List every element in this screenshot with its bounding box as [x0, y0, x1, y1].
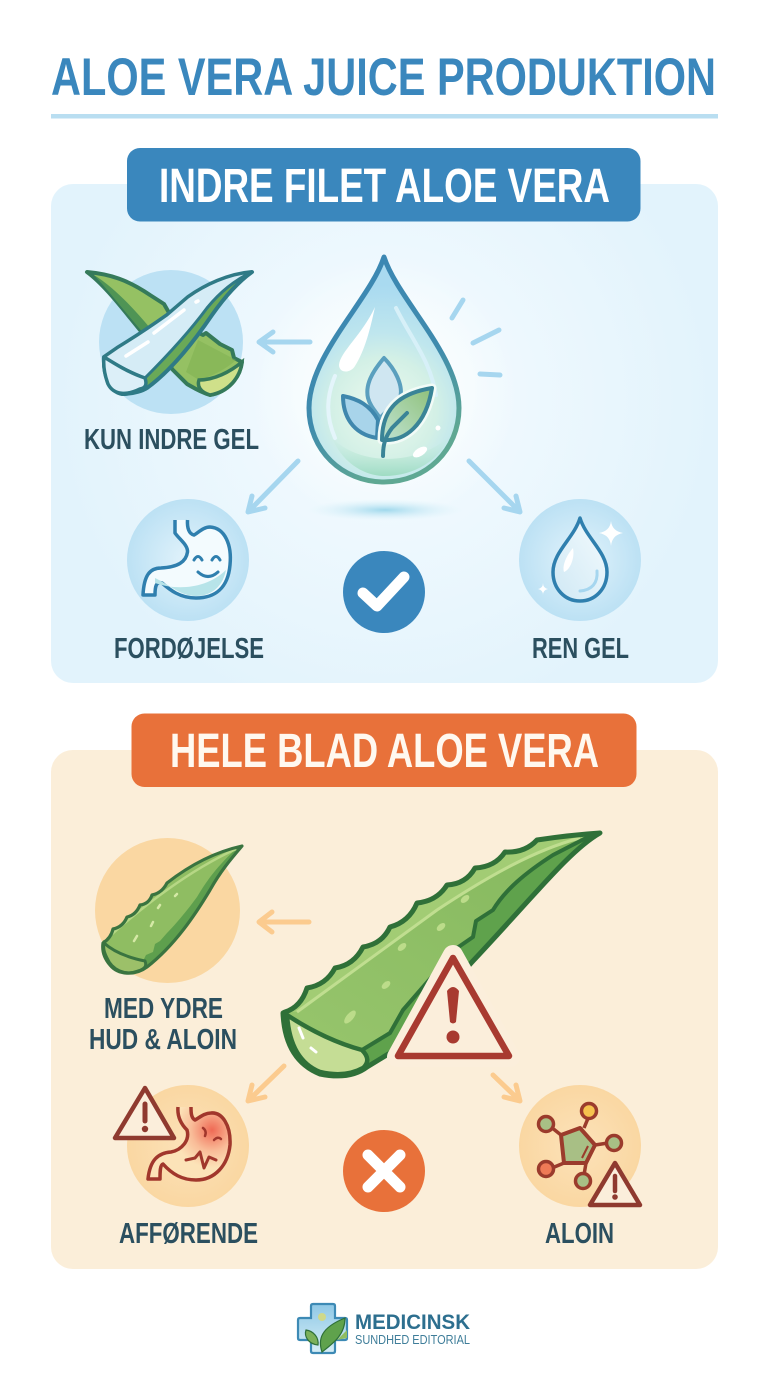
panel: hele blad [51, 714, 718, 1269]
icon: irritated stomach with warning [115, 1085, 249, 1207]
panel background: orange [51, 750, 718, 1269]
icon: centre leaf [367, 358, 401, 418]
icon: large warning triangle [397, 955, 510, 1057]
panel: indre filet [51, 148, 718, 683]
icon: pure gel drop [519, 499, 641, 621]
icon: sparkle rays [452, 300, 500, 375]
label: med ydre hud og aloin: MED YDRE [104, 993, 223, 1025]
arrow: to inner gel [259, 332, 310, 352]
gel fillet [104, 272, 252, 394]
heading badge: hele blad [132, 714, 636, 787]
icon: small warning [115, 1088, 174, 1138]
icon: happy stomach [127, 499, 249, 621]
heading badge: hele blad: HELE BLAD ALOE VERA [170, 725, 599, 778]
label: afforende: AFFØRENDE [119, 1218, 258, 1250]
icon: large aloe leaf [283, 833, 600, 1076]
arrow: to digestion [248, 461, 298, 512]
heading badge: indre filet: INDRE FILET ALOE VERA [159, 160, 610, 213]
icon: check mark badge [343, 551, 425, 633]
label: med ydre hud og aloin [89, 993, 237, 1056]
logo tagline: SUNDHED EDITORIAL [355, 1333, 470, 1347]
icon: aloin molecule with warning [519, 1085, 641, 1207]
heading badge: indre filet [127, 148, 640, 222]
logo: medicinsk sundhed editorial [298, 1304, 470, 1353]
label: ren gel: REN GEL [532, 633, 629, 665]
icon: right leaf [382, 388, 432, 440]
panel background: blue [51, 184, 718, 683]
arrow: to aloin [493, 1075, 520, 1101]
arrow: to pure gel [469, 461, 520, 512]
logo wordmark: MEDICINSK [355, 1311, 470, 1334]
arrow: to skin [259, 912, 309, 932]
icon: central water drop with leaves [249, 255, 519, 525]
icon: small leaf with skin [95, 838, 242, 983]
label: kun indre gel: KUN INDRE GEL [84, 424, 259, 456]
icon: small warning [590, 1163, 640, 1205]
label: fordojelse: FORDØJELSE [114, 633, 264, 665]
arrow: to laxative [248, 1066, 284, 1101]
label: med ydre hud og aloin: HUD & ALOIN [89, 1024, 237, 1056]
label: aloin: ALOIN [545, 1218, 614, 1250]
icon: left leaf [343, 396, 378, 438]
icon: crossed leaf and gel fillet [87, 270, 252, 414]
icon: cross badge [343, 1130, 425, 1212]
green outer leaf [87, 272, 242, 395]
logo icon: cross with leaves [298, 1304, 347, 1353]
